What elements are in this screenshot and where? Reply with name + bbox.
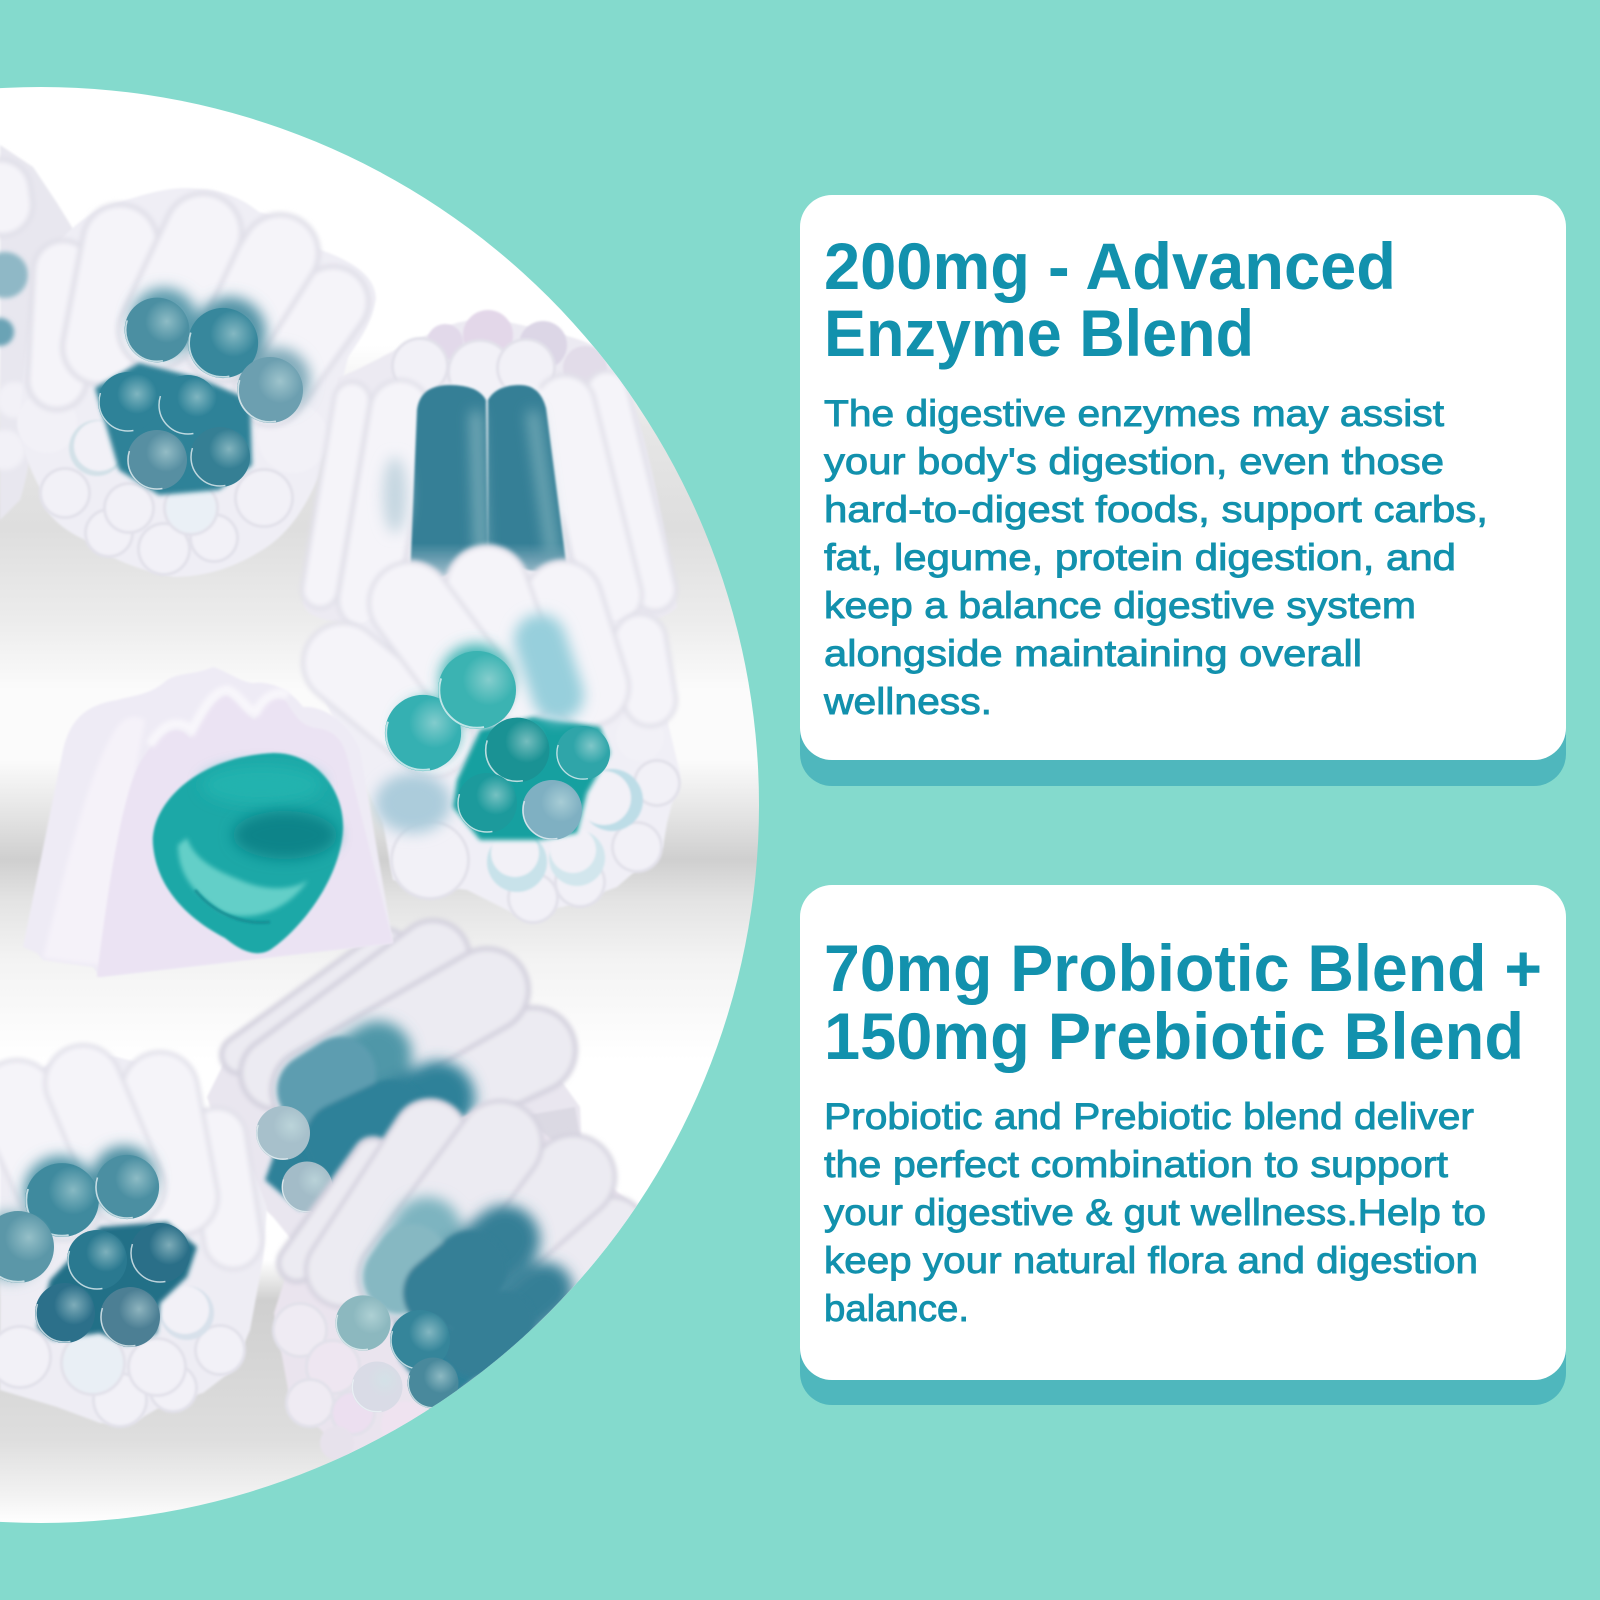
- fingers: [57, 232, 333, 390]
- teal sections: [262, 1124, 336, 1213]
- body: [20, 188, 376, 577]
- heading: 70mg Probiotic Blend +: [824, 931, 1542, 1005]
- side pleat: [43, 717, 145, 965]
- body text: alongside maintaining overall: [824, 633, 1362, 674]
- teal balls: [98, 298, 303, 490]
- panel: probiotic and prebiotic blend: [800, 885, 1566, 1405]
- body: [320, 557, 680, 913]
- teal pool: [95, 363, 252, 495]
- body text: your digestive & gut wellness.Help to: [824, 1192, 1486, 1233]
- gummy: standing with teal blob: [23, 667, 393, 977]
- fingers: [17, 1083, 233, 1240]
- columns: [320, 392, 655, 600]
- body text: the perfect combination to support: [824, 1144, 1449, 1185]
- body text: keep a balance digestive system: [824, 585, 1416, 626]
- body text: your body's digestion, even those: [824, 441, 1444, 482]
- teal sections: [395, 1322, 490, 1410]
- panel: enzyme blend: [800, 195, 1566, 786]
- teal blob: [153, 753, 343, 953]
- photo circle with gummies: [0, 80, 770, 1530]
- fingers: [297, 1137, 613, 1347]
- crown bumps: [396, 309, 606, 378]
- teal pool: [37, 1222, 197, 1345]
- body text: Probiotic and Prebiotic blend deliver: [824, 1096, 1474, 1137]
- heading: Enzyme Blend: [824, 296, 1254, 370]
- body text: The digestive enzymes may assist: [824, 393, 1445, 434]
- card: [800, 885, 1566, 1380]
- body text: fat, legume, protein digestion, and: [824, 537, 1456, 578]
- front face: [98, 768, 350, 976]
- teal balls: [385, 651, 610, 840]
- card shadow: [800, 220, 1566, 786]
- lower bumps: [0, 1286, 246, 1428]
- gummy: top view upper: [17, 188, 376, 577]
- side balls: [256, 1106, 332, 1212]
- teal glow: [130, 288, 310, 412]
- teal balls: [0, 1155, 190, 1347]
- gummy: bottom right fingers: [272, 1100, 640, 1460]
- back crown and body: [27, 668, 390, 938]
- teal glow: [396, 640, 558, 762]
- body: [344, 321, 650, 558]
- body text: hard-to-digest foods, support carbs,: [824, 489, 1488, 530]
- dark teal capsule: [410, 385, 568, 578]
- crown highlight: [150, 690, 288, 745]
- teal pool: [453, 717, 610, 840]
- circle background with soft shadows: [0, 80, 770, 1530]
- gummy: top view lower left: [0, 1053, 267, 1428]
- gummy: upper left partial: [0, 145, 78, 520]
- gummy: top view bright teal: [320, 557, 681, 924]
- bumps: [272, 1302, 429, 1460]
- side balls: [335, 1295, 458, 1412]
- body text: keep your natural flora and digestion: [824, 1240, 1478, 1281]
- body: [0, 1053, 267, 1423]
- heading: 150mg Prebiotic Blend: [824, 999, 1524, 1073]
- gummy: standing with dark capsule: [303, 310, 677, 630]
- body: [274, 1100, 640, 1456]
- pale ball left: [375, 773, 451, 833]
- heading: 200mg - Advanced: [824, 229, 1396, 303]
- lower bumps: [18, 420, 294, 574]
- rear plate: [536, 1108, 578, 1138]
- body text: balance.: [824, 1288, 969, 1329]
- body: [207, 1066, 582, 1237]
- fingers: [240, 948, 533, 1140]
- card: [800, 195, 1566, 760]
- teal glow: [0, 1146, 156, 1280]
- fingers: [343, 587, 650, 737]
- gummy: bottom behind: [207, 942, 582, 1250]
- lower bumps: [390, 760, 681, 921]
- card shadow: [800, 910, 1566, 1405]
- body text: wellness.: [823, 681, 992, 722]
